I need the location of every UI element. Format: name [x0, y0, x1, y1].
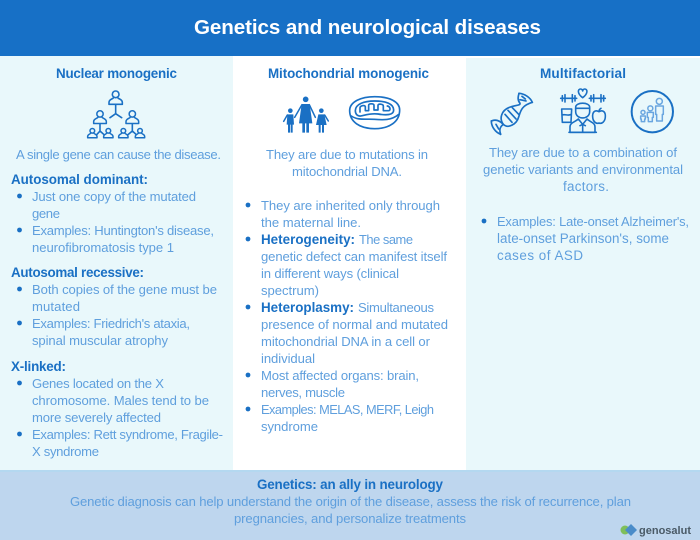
bullet: heterogeneity: Heterogeneity: — [261, 232, 355, 247]
section: x-linked: chromosome. Males tend to be — [32, 393, 209, 408]
section: autosomal recessive: Examples: Friedrich's ataxia, — [32, 316, 190, 331]
bullet: examples: late-onset Parkinson's, some — [497, 231, 669, 246]
bullet: affected organs: nerves, muscle — [261, 385, 345, 400]
section: x-linked: Examples: Rett syndrome, Fragile- — [32, 427, 223, 442]
footer heading: Genetics: an ally in neurology — [257, 477, 444, 492]
heading: multifactorial: Multifactorial — [540, 66, 626, 81]
heading: mitochondrial monogenic: Mitochondrial monogenic — [268, 66, 430, 81]
section: x-linked: Genes located on the X — [32, 376, 164, 391]
bullet: heterogeneity: The same — [359, 232, 413, 247]
icon: family in circle — [632, 91, 673, 132]
bullet: examples — [482, 214, 689, 263]
bullet: maternal inheritance — [246, 198, 440, 230]
section: autosomal dominant: Autosomal dominant: — [11, 172, 148, 187]
section: autosomal dominant: Just one copy of the mutated — [32, 189, 196, 204]
footer text — [70, 494, 631, 526]
icon: mitochondrion — [350, 97, 400, 129]
bullet: maternal inheritance: They are inherited only through — [261, 198, 440, 213]
icon: healthy lifestyle person — [561, 89, 605, 132]
section: autosomal recessive: Both copies of the gene must be — [32, 282, 217, 297]
bullet: heteroplasmy: presence of normal and mutated — [261, 317, 448, 332]
footer panel — [0, 470, 700, 540]
bullet: examples — [246, 402, 434, 434]
bullet: examples: Examples: Late-onset Alzheimer's, — [497, 214, 689, 229]
section: autosomal dominant — [11, 172, 214, 255]
panel: nuclear monogenic — [0, 56, 233, 471]
intro text: mitochondrial DNA. — [292, 164, 402, 179]
panel: multifactorial — [466, 58, 700, 471]
section: x-linked: more severely affected — [32, 410, 161, 425]
bullet: heterogeneity: genetic defect can manifest itself — [261, 249, 447, 264]
intro text — [483, 145, 683, 194]
bullet: maternal inheritance: the maternal line. — [261, 215, 361, 230]
intro text: genetic variants and environmental — [483, 162, 683, 177]
section: autosomal recessive: Autosomal recessive: — [11, 265, 144, 280]
bullet: affected organs: Most affected organs: brain, — [261, 368, 419, 383]
section: x-linked: X-linked: — [11, 359, 66, 374]
intro text: They are due to a combination of — [489, 145, 677, 160]
bullet: examples: syndrome — [261, 419, 318, 434]
logo: genosalut: genosalut — [639, 525, 691, 537]
footer text: pregnancies, and personalize treatments — [234, 511, 466, 526]
bullet: heteroplasmy — [246, 300, 448, 366]
header banner — [0, 0, 700, 56]
intro text: A single gene can cause the disease. — [16, 147, 221, 162]
intro text: factors. — [563, 179, 609, 194]
bullet: heterogeneity: in different ways (clinical — [261, 266, 399, 281]
bullet: heteroplasmy: Heteroplasmy: — [261, 300, 354, 315]
bullet: heteroplasmy: Simultaneous — [358, 300, 434, 315]
panel: mitochondrial monogenic — [233, 56, 466, 471]
section: autosomal dominant: Examples: Huntington's disease, — [32, 223, 214, 238]
section: x-linked: X syndrome — [32, 444, 99, 459]
bullet: heterogeneity — [246, 232, 447, 298]
section: autosomal recessive: mutated — [32, 299, 80, 314]
section: autosomal recessive — [11, 265, 217, 348]
section: autosomal dominant: gene — [32, 206, 60, 221]
bullet: heteroplasmy: mitochondrial DNA in a cell or — [261, 334, 431, 349]
bullet: heteroplasmy: individual — [261, 351, 315, 366]
icon: mother holding hands with two children — [284, 96, 328, 133]
logo: genosalut — [620, 524, 691, 537]
footer text: Genetic diagnosis can help understand the origin of the disease, assess the risk of recurrence, plan — [70, 494, 631, 509]
section: autosomal recessive: spinal muscular atrophy — [32, 333, 168, 348]
bullet: examples: cases of ASD — [497, 248, 583, 263]
intro text — [266, 147, 428, 179]
section: autosomal dominant: neurofibromatosis type 1 — [32, 240, 174, 255]
bullet: examples: Examples: MELAS, MERF, Leigh — [261, 402, 434, 417]
heading: nuclear monogenic: Nuclear monogenic — [56, 66, 178, 81]
icon: DNA helix — [491, 93, 532, 134]
icon: family tree of people — [88, 91, 145, 138]
bullet: heterogeneity: spectrum) — [261, 283, 319, 298]
section: x-linked — [11, 359, 223, 459]
intro text: They are due to mutations in — [266, 147, 428, 162]
bullet: affected organs — [246, 368, 419, 400]
title: Genetics and neurological diseases — [194, 16, 541, 39]
